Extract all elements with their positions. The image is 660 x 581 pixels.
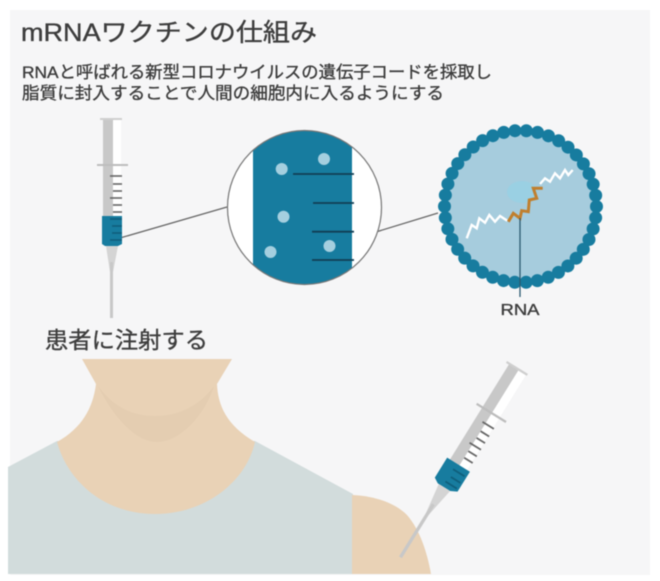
chin shadow [98,386,214,442]
shoulder [352,495,431,574]
icon: vertical syringe [97,118,128,318]
patient figure [8,359,431,574]
RNA label: RNA [500,302,540,319]
syringe scale marks [293,174,354,260]
text block: description: 脂質に封入することで人間の細胞内に入るようにする [22,84,444,103]
RNA label [500,218,540,319]
RNA strand [467,170,573,238]
text block: description [22,63,492,103]
label: inject patient: 患者に注射する [45,327,208,353]
title: mRNAワクチンの仕組み [21,19,317,47]
icon: injecting syringe [387,359,534,567]
text block: description: RNAと呼ばれる新型コロナウイルスの遺伝子コードを採取し [22,63,492,82]
neck and chest [57,359,255,514]
lipid nanoparticle [444,130,596,282]
particles in liquid [264,153,336,258]
connector: syringe to magnifier [120,207,227,238]
magnifier: zoomed view of syringe [228,128,382,288]
connector: particle to lipid nanoparticle [330,213,438,246]
shirt [8,441,353,574]
